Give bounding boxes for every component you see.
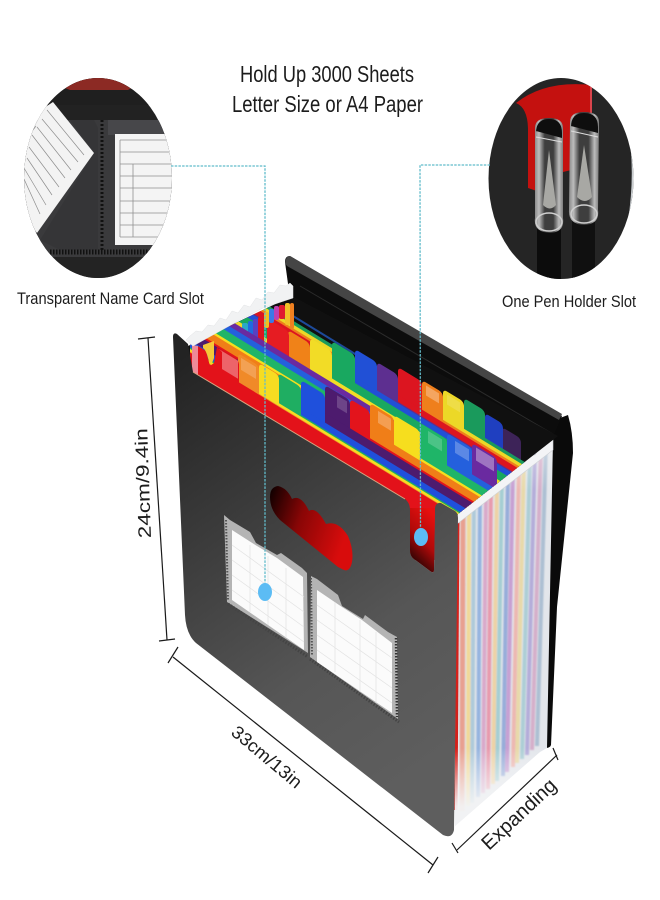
title: Letter Size or A4 Paper xyxy=(232,91,423,117)
title xyxy=(232,61,423,117)
back row of tabs xyxy=(190,306,525,514)
dimension: height: 24cm/9.4in xyxy=(131,428,155,539)
icon: left pen xyxy=(535,118,563,282)
icon: name card marker dot xyxy=(258,583,272,601)
caption: transparent name card slot: Transparent Name Card Slot xyxy=(17,289,204,308)
dimension: width: 33cm/13in xyxy=(227,722,306,792)
icon: pen holder marker dot xyxy=(414,528,428,546)
panel: name card slot detail circle xyxy=(24,78,172,278)
front cover panel xyxy=(173,333,458,836)
dimension: width xyxy=(168,647,438,873)
front red sheet left end xyxy=(192,341,222,374)
left name card pocket xyxy=(224,515,308,657)
front row of tabs xyxy=(190,324,498,515)
tan highlight along front edge xyxy=(193,372,405,499)
notch showing red divider xyxy=(410,508,435,572)
white accordion back edge xyxy=(186,283,293,346)
callout: pen holder leader xyxy=(414,165,490,546)
caption: one pen holder slot: One Pen Holder Slot xyxy=(502,292,636,311)
icon: right pen xyxy=(569,112,599,282)
back cover and flap xyxy=(285,256,573,748)
panel: pen holder detail circle xyxy=(485,75,640,282)
title: Hold Up 3000 Sheets xyxy=(240,61,414,87)
right name card pocket xyxy=(310,576,399,722)
accordion side with rainbow pleats xyxy=(455,436,553,826)
dimension: height xyxy=(131,337,175,641)
dimension: expanding: Expanding xyxy=(477,774,561,855)
cloud shaped window xyxy=(270,486,352,570)
dimension: expanding xyxy=(452,748,561,855)
divider left-end folds xyxy=(242,303,294,341)
index dividers with coloured tabs xyxy=(188,299,554,560)
callout: name card slot leader xyxy=(171,166,272,601)
